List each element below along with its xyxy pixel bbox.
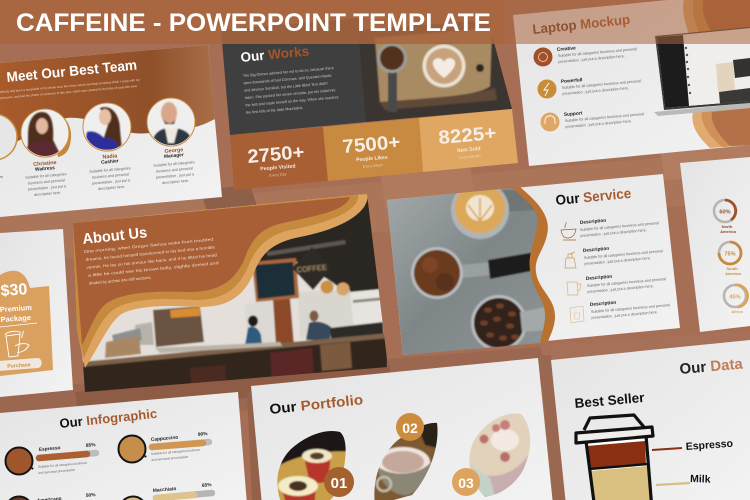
espresso label: Espresso [685,438,733,453]
espresso row [6,442,96,475]
team member: Christine [21,109,71,198]
stat: people visited: 2750+ [247,142,305,168]
feature: creative: Suitable for all categories business and personal [558,47,637,58]
stat: item sold: 8225+ [438,123,497,149]
counter [83,337,388,392]
pillar [273,298,294,347]
stat: people likes: Every Week [363,163,383,169]
team member: Christine: Waitress [35,165,55,173]
stat: item sold [419,109,518,172]
panel: our works slide [221,10,520,190]
team header banner [0,45,215,150]
feature: powerful: Powerfull [561,77,583,85]
donut: north america: 60% [719,210,731,216]
team member: George: Suitable for all categories [153,160,195,168]
service item 3: presentation , just put a description here. [587,284,654,294]
coffee diamond sign: COFFEE [296,263,327,274]
team member: George: description here. [162,179,189,185]
donut: north america: North [722,224,733,229]
badge 01: 01 [331,475,347,492]
service item 2: Suitable for all categories business and personal [584,249,663,260]
price card: Premium [0,303,32,314]
team member: Nadia: description here. [98,185,125,191]
team member: Christine: Christine [33,160,57,168]
data heading: Our Data [679,355,744,378]
works paragraph: listen. She packed her seven versalia, put her initial into [245,88,336,100]
espresso label [652,438,733,453]
donut: africa: 45% [729,294,741,300]
team intro text: Wendy had been a housewife of my whole soul, like these sweet mornings of spring which I enjoy with my [0,78,140,94]
cappuccino row: Suitable for all categories business [151,448,201,456]
wave accent [505,187,555,345]
feature: support: presentation , just put a description here. [565,119,632,129]
service item 1: presentation , just put a description here. [580,228,647,238]
panel: our infographic slide [0,392,247,500]
service photo [387,188,546,355]
service item 4: Description [590,300,617,308]
feature: creative: Creative [557,45,576,53]
team member: Nadia [83,103,133,192]
team member: Nadia: Suitable for all categories [89,166,131,174]
donut: africa [724,285,748,314]
about paragraph: One morning, when Gregor Samsa woke from troubled [84,237,213,254]
team member: Nadia: business and personal [92,172,129,180]
about paragraph: divided by arches into stiff sections. [89,275,152,286]
infographic heading: Our Infographic [59,406,158,431]
service item 1: Description [580,218,607,226]
badge 01 [324,467,354,497]
badge 02: 02 [402,420,418,436]
stat: item sold: Item Sold [457,146,481,154]
works paragraph: were thousands of bad Commas, wild Question Marks [243,74,332,85]
donut: south america: America [725,271,742,276]
donut: south america: South [726,266,738,271]
team member: Nadia: Cashier [101,158,119,166]
works paragraph [243,66,339,115]
service item 4 [570,300,671,323]
panel: team slide [0,45,222,217]
team member: George: George [164,147,184,155]
service item 2 [565,246,664,268]
windows and shelves [349,288,379,297]
price card: Package [0,313,31,324]
portfolio image 2 [374,422,438,500]
feature: creative: presentation , just put a description here. [558,54,625,64]
service item 4: Suitable for all categories business and personal [591,303,670,314]
americano row [6,492,96,500]
team member: partial left [0,114,17,179]
icon: coffee cup [5,331,29,357]
espresso row: and personal presentation [38,468,76,475]
team intro text: presence, and feel the charm of existence in this spot, which was created for the bliss of souls like mine [0,84,138,100]
purchase button: Purchase [7,362,31,370]
team member: George: presentation , just put a [156,172,195,180]
donut: south america [719,242,742,276]
back shelf [153,306,204,347]
stat: people visited: People Visited [260,163,296,173]
panel: our portfolio slide [251,358,553,500]
feature: powerful: Suitable for all categories business and personal [562,79,641,90]
service item 3: Suitable for all categories business and personal [587,277,666,288]
coffee cup chart [576,415,653,500]
portfolio image 3 [469,413,530,497]
portafilter [377,43,407,112]
price card [0,271,53,376]
macchiato row [120,482,212,500]
laptop image [654,27,750,116]
team member: Christine: business and personal [28,178,65,185]
stat: people likes: 7500+ [342,132,401,158]
portfolio heading: Our Portfolio [269,391,364,417]
cappuccino row: and personal presentation [151,455,189,462]
team member: George [147,98,197,186]
feature: support: Support [564,110,583,118]
feature: support: Suitable for all categories business and personal [565,112,644,123]
donut: south america: 75% [724,252,736,258]
service item 3 [567,274,667,295]
team heading: Meet Our Best Team [6,57,138,85]
espresso row: 85% [86,442,96,449]
feature: support [540,110,645,132]
ceiling [259,194,379,293]
cappuccino row: 90% [198,431,208,438]
team member: partial left: et [0,175,3,179]
team member: George: Manager [164,152,184,160]
about photo [70,190,395,400]
panel: our data slide [551,340,750,500]
team member: Christine: Suitable for all categories [25,172,67,180]
works heading: Our Works [240,43,310,65]
macchiato row: Macchiato [153,486,177,494]
panel: our service slide [380,174,680,360]
about paragraph [84,236,220,286]
feature: powerful: presentation , just put a description here. [562,86,629,96]
service item 4: presentation , just put a description here. [591,310,658,320]
stat: people likes: People Likes [356,155,388,163]
americano row: 50% [86,492,96,499]
latte portafilter [450,189,534,240]
about paragraph: a little he could see his brown belly, slightly domed and [88,260,219,278]
panel: regional donut slide [680,157,750,332]
works paragraph: and devious Semikoli, but the Little Blind Text didn't [244,81,328,93]
laptop heading: Laptop Mockup [532,12,631,37]
service item 1: Suitable for all categories business and personal [580,221,659,232]
panel: about us slide [70,190,395,400]
team member: Christine: description here. [34,191,61,197]
macchiato row: 65% [202,482,212,489]
service heading: Our Service [555,185,632,208]
title banner [0,0,750,44]
stat: people visited [230,127,328,190]
feature: creative [534,45,638,66]
barista figures [245,310,384,345]
cappuccino row: Cappuccino [151,435,179,443]
works paragraph: The Big Oxmox advised her not to do so, because there [243,66,334,78]
works paragraph: the first hills of the Italic Mountains. [246,106,303,115]
service item 3: Description [586,274,613,282]
panel: price slide [0,229,73,397]
latte cup [422,44,466,88]
stat: item sold: Every Month [459,154,481,160]
service item 1 [561,218,660,240]
badge 03: 03 [458,475,474,491]
bottom right waves [692,108,750,148]
works paragraph: the belt and made herself on the way. When she reached [245,95,339,107]
best seller heading: Best Seller [574,390,646,411]
feature: powerful [538,77,642,98]
panel: laptop mockup slide [513,0,750,166]
espresso row: Suitable for all categories business [38,461,88,469]
donut: north america: America [720,229,737,234]
top right waves [683,0,750,38]
about paragraph: vermin. He lay on his armour like back, and if he lifted his head [86,252,217,270]
badge 03 [452,468,480,496]
team member: Nadia: Nadia [102,153,118,161]
team member: Christine: presentation , just put a [28,184,67,192]
service item 2: presentation , just put a description here. [584,256,651,266]
badge 02 [396,413,424,441]
ground coffee portafilter [411,247,537,299]
works photo [360,20,512,122]
about curved bands [73,194,367,368]
chalkboard [252,258,299,302]
donut: north america [714,200,737,234]
team member: George: business and personal [156,166,193,174]
stat: people visited: Every Day [269,172,287,178]
about heading: About Us [82,224,148,248]
coffee beans portafilter [471,295,550,351]
espresso row: Espresso [39,445,61,453]
team member: Nadia: presentation , just put a [92,178,131,186]
stat: people likes [323,118,423,181]
coffee diamond sign [292,247,332,290]
donut: africa: Africa [731,309,743,314]
milk label: Milk [690,473,711,486]
price card: $30 [0,281,28,300]
about paragraph: dreams, he found himself transformed in his bed into a horrible [85,244,216,262]
cappuccino row [118,431,209,462]
title text: CAFFEINE - POWERPOINT TEMPLATE [16,9,491,37]
service item 2: Description [583,246,610,254]
milk label [656,473,711,486]
portfolio image 1 [277,431,346,500]
